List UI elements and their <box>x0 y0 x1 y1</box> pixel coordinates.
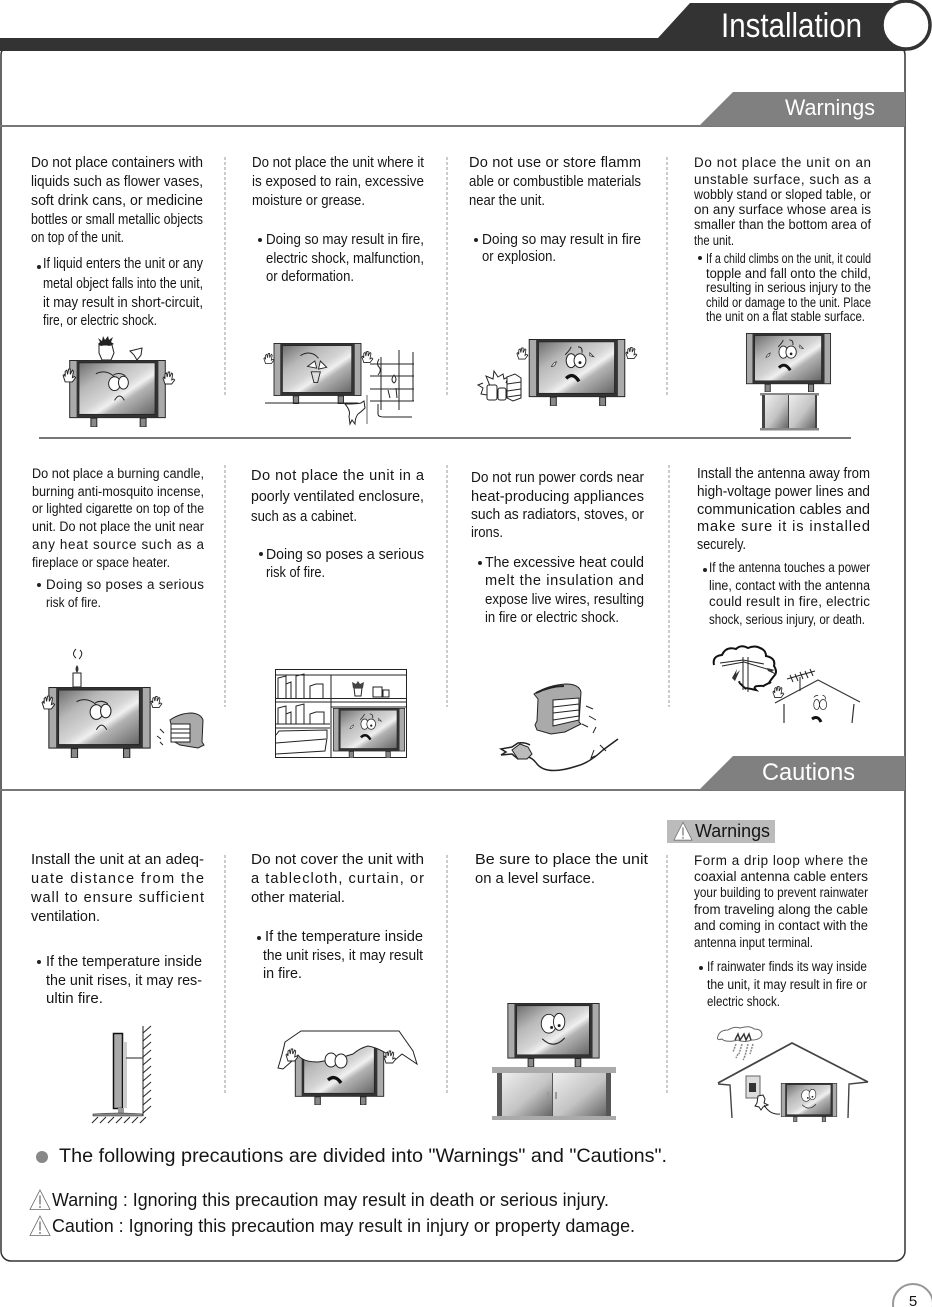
bullet text: fire or shock: Doing so may result in fire, <box>266 232 424 248</box>
bullet text: liquid entering <box>37 256 204 329</box>
illustration: tv under tablecloth <box>278 1031 417 1105</box>
text: ventilation distance caution: ventilation. <box>31 909 100 925</box>
bullet text: child injury: child or damage to the unit. Place <box>706 295 871 310</box>
section heading: warnings: Warnings <box>785 95 875 120</box>
panel: flammable materials <box>469 155 641 406</box>
text: exposure warning <box>252 155 424 209</box>
panel: rain and moisture <box>252 155 424 424</box>
panel: level surface <box>475 852 648 1120</box>
text: drip loop instruction: and coming in contact with the <box>694 918 868 933</box>
illustration: tv beside steaming kitchen wall <box>264 343 414 424</box>
text: unstable surface warning: smaller than the bottom area of <box>694 217 871 232</box>
text: unstable surface warning: Do not place the unit on an <box>694 155 871 170</box>
text: containers warning: soft drink cans, or medicine <box>31 193 203 209</box>
text: drip loop instruction: Form a drip loop where the <box>694 853 868 868</box>
illustration: side view of tv near wall <box>92 1026 151 1123</box>
bullet text: liquid entering: If liquid enters the unit or any <box>43 256 204 272</box>
bullet text: explosion: Doing so may result in fire <box>482 232 641 248</box>
bullet text: melted insulation: in fire or electric shock. <box>485 610 619 626</box>
text: drip loop instruction: your building to prevent rainwater <box>694 885 868 900</box>
bullet text: liquid entering: metal object falls into the unit, <box>43 276 203 292</box>
bullet text: child injury: the unit on a flat stable surface. <box>706 309 865 324</box>
text: antenna warning: communication cables and <box>697 502 870 518</box>
text: flammable warning: able or combustible materials <box>469 174 641 190</box>
text: containers warning: Do not place containers with <box>31 155 203 171</box>
panel: antenna placement <box>697 466 871 723</box>
text: flammable warning: Do not use or store flamm <box>469 155 641 171</box>
text: unstable surface warning: the unit. <box>694 233 734 248</box>
panel: drip loop warning <box>667 820 868 1122</box>
bullet text: fire or shock <box>258 232 424 285</box>
bullet text: risk of fire: Doing so poses a serious <box>266 547 424 563</box>
divider <box>39 437 851 439</box>
text: ventilation warning <box>251 468 425 525</box>
bullet text: fire or shock: electric shock, malfunction, <box>266 251 424 267</box>
bullet text: antenna contact: line, contact with the antenna <box>709 578 871 593</box>
text: burning candle warning: any heat source such as a <box>32 537 205 552</box>
text: burning candle warning <box>32 466 205 570</box>
bullet text: temperature rise: If the temperature inside <box>46 954 202 970</box>
text: burning candle warning: fireplace or space heater. <box>32 555 170 570</box>
legend <box>30 1145 667 1236</box>
bullet text: antenna contact: If the antenna touches a power <box>709 560 870 575</box>
bullet text: temperature rise: in fire. <box>263 966 302 982</box>
illustration: tv on level cabinet <box>492 1003 616 1120</box>
text: covering caution <box>251 852 424 906</box>
illustration: tv on small cabinet <box>746 333 831 430</box>
text: containers warning <box>31 155 203 246</box>
text: unstable surface warning: wobbly stand or sloped table, or <box>693 187 871 202</box>
text: power cord warning: irons. <box>471 525 503 541</box>
text: ventilation distance caution: uate distance from the <box>31 871 204 887</box>
bullet text: risk of fire <box>37 577 204 610</box>
text: drip loop instruction: coaxial antenna cable enters <box>694 869 868 884</box>
text: power cord warning: heat-producing appliances <box>471 489 644 505</box>
text: covering caution: other material. <box>251 890 345 906</box>
bullet text: rainwater: If rainwater finds its way inside <box>707 959 867 974</box>
illustration: tv in bookcase <box>275 670 406 758</box>
text: ventilation distance caution: wall to ensure sufficient <box>30 890 204 906</box>
bullet text: temperature rise <box>37 954 202 1007</box>
text: power cord warning: Do not run power cords near <box>471 470 644 486</box>
text: containers warning: bottles or small metallic objects <box>31 212 203 228</box>
bullet text: child injury: topple and fall onto the child, <box>706 266 871 281</box>
text: antenna warning: high-voltage power lines and <box>697 484 870 500</box>
bullet text: explosion <box>474 232 641 265</box>
text: level surface caution <box>475 852 648 887</box>
icon: warning triangle <box>30 1190 50 1210</box>
legend intro: The following precautions are divided into "Warnings" and "Cautions". <box>59 1145 667 1167</box>
bullet text: rainwater: the unit, it may result in fire or <box>707 977 867 992</box>
title circle <box>882 1 930 49</box>
bullet text: liquid entering: it may result in short-circuit, <box>43 295 203 311</box>
illustration: house antenna and power line cloud <box>714 646 860 723</box>
text: flammable warning: near the unit. <box>469 193 545 209</box>
divider <box>225 465 669 707</box>
text: drip loop instruction <box>694 853 868 950</box>
warning badge: Warnings <box>695 821 770 841</box>
panel: power cords <box>471 470 644 771</box>
panel: wall distance <box>30 852 204 1123</box>
text: exposure warning: moisture or grease. <box>252 193 365 209</box>
bullet text: temperature rise: ultin fire. <box>46 991 103 1007</box>
illustration: tv with flammable canisters <box>478 339 637 406</box>
illustration: tv with flower vase <box>63 336 175 427</box>
bullet text: risk of fire: risk of fire. <box>266 565 325 581</box>
text: ventilation warning: such as a cabinet. <box>251 509 357 525</box>
text: ventilation warning: Do not place the unit in a <box>251 468 425 484</box>
divider <box>225 855 667 1095</box>
warning badge <box>667 820 775 843</box>
text: exposure warning: is exposed to rain, excessive <box>252 174 424 190</box>
illustration: tv with candle and heater <box>42 649 204 758</box>
bullet text: melted insulation <box>478 555 644 626</box>
text: drip loop instruction: antenna input terminal. <box>694 935 813 950</box>
text: burning candle warning: burning anti-mosquito incense, <box>32 484 204 499</box>
text: power cord warning: such as radiators, stoves, or <box>471 507 644 523</box>
warning definition: Warning : Ignoring this precaution may result in death or serious injury. <box>52 1189 609 1210</box>
bullet text: child injury: resulting in serious injury to the <box>706 280 871 295</box>
bullet text: antenna contact <box>703 560 871 627</box>
caution definition: Caution : Ignoring this precaution may result in injury or property damage. <box>52 1215 635 1236</box>
text: ventilation distance caution: Install the unit at an adeq- <box>31 852 204 868</box>
text: covering caution: Do not cover the unit with <box>251 852 424 868</box>
text: containers warning: liquids such as flower vases, <box>31 174 203 190</box>
text: unstable surface warning: on any surface whose area is <box>694 202 871 217</box>
bullet text: explosion: or explosion. <box>482 249 556 265</box>
text: antenna warning: make sure it is installed <box>697 519 870 535</box>
text: ventilation warning: poorly ventilated enclosure, <box>251 489 424 505</box>
panel: unstable surface <box>693 155 872 430</box>
bullet text: child injury: If a child climbs on the unit, it could <box>706 251 871 266</box>
bullet text: melted insulation: The excessive heat could <box>485 555 644 571</box>
bullet text: antenna contact: shock, serious injury, or death. <box>709 612 865 627</box>
panel: do not cover <box>251 852 424 1105</box>
text: flammable warning <box>469 155 641 209</box>
bullet text: melted insulation: melt the insulation and <box>485 573 644 589</box>
text: unstable surface warning: unstable surface, such as a <box>694 172 872 187</box>
section heading: cautions <box>0 756 905 791</box>
bullet text: fire or shock: or deformation. <box>266 269 354 285</box>
bullet text: temperature rise: the unit rises, it may result <box>263 948 423 964</box>
page number <box>893 1284 932 1307</box>
panel: candles and heat sources <box>32 466 205 758</box>
bullet text: liquid entering: fire, or electric shock. <box>43 313 157 329</box>
text: level surface caution: on a level surface. <box>475 871 595 887</box>
bullet text: rainwater <box>699 959 867 1009</box>
text: antenna warning: securely. <box>697 537 746 553</box>
text: covering caution: a tablecloth, curtain, or <box>251 871 424 887</box>
text: burning candle warning: or lighted cigarette on top of the <box>32 501 204 516</box>
text: antenna warning: Install the antenna away from <box>697 466 870 482</box>
title: Installation <box>721 7 862 45</box>
text: power cord warning <box>471 470 644 541</box>
text: antenna warning <box>697 466 870 553</box>
text: burning candle warning: unit. Do not place the unit near <box>32 519 205 534</box>
panel: poor ventilation <box>251 468 425 758</box>
section heading: cautions: Cautions <box>762 759 855 786</box>
bullet text: child injury <box>698 251 871 324</box>
bullet text: antenna contact: could result in fire, electric <box>709 594 870 609</box>
illustration: heater and damaged plug <box>501 684 618 771</box>
text: containers warning: on top of the unit. <box>31 230 124 246</box>
text: burning candle warning: Do not place a burning candle, <box>32 466 204 481</box>
text: exposure warning: Do not place the unit where it <box>252 155 424 171</box>
bullet text: melted insulation: expose live wires, resulting <box>485 592 644 608</box>
bullet text: rainwater: electric shock. <box>707 994 780 1009</box>
divider <box>225 157 667 395</box>
text: drip loop instruction: from traveling along the cable <box>694 902 868 917</box>
bullet text: temperature rise: If the temperature inside <box>265 929 423 945</box>
bullet text: temperature rise: the unit rises, it may res- <box>46 973 202 989</box>
panel: containers of liquid <box>31 155 204 427</box>
section heading: warnings <box>0 92 905 127</box>
bullet text: risk of fire <box>259 547 424 581</box>
bullet text: risk of fire: Doing so poses a serious <box>46 577 204 592</box>
legend bullet <box>36 1151 48 1163</box>
illustration: house in rain with tv <box>718 1027 868 1122</box>
text: level surface caution: Be sure to place the unit <box>475 852 648 868</box>
text: unstable surface warning <box>693 155 872 248</box>
title banner <box>0 1 930 51</box>
bullet text: risk of fire: risk of fire. <box>46 595 101 610</box>
text: ventilation distance caution <box>30 852 204 925</box>
icon: caution triangle <box>30 1216 50 1236</box>
bullet text: temperature rise <box>257 929 423 982</box>
